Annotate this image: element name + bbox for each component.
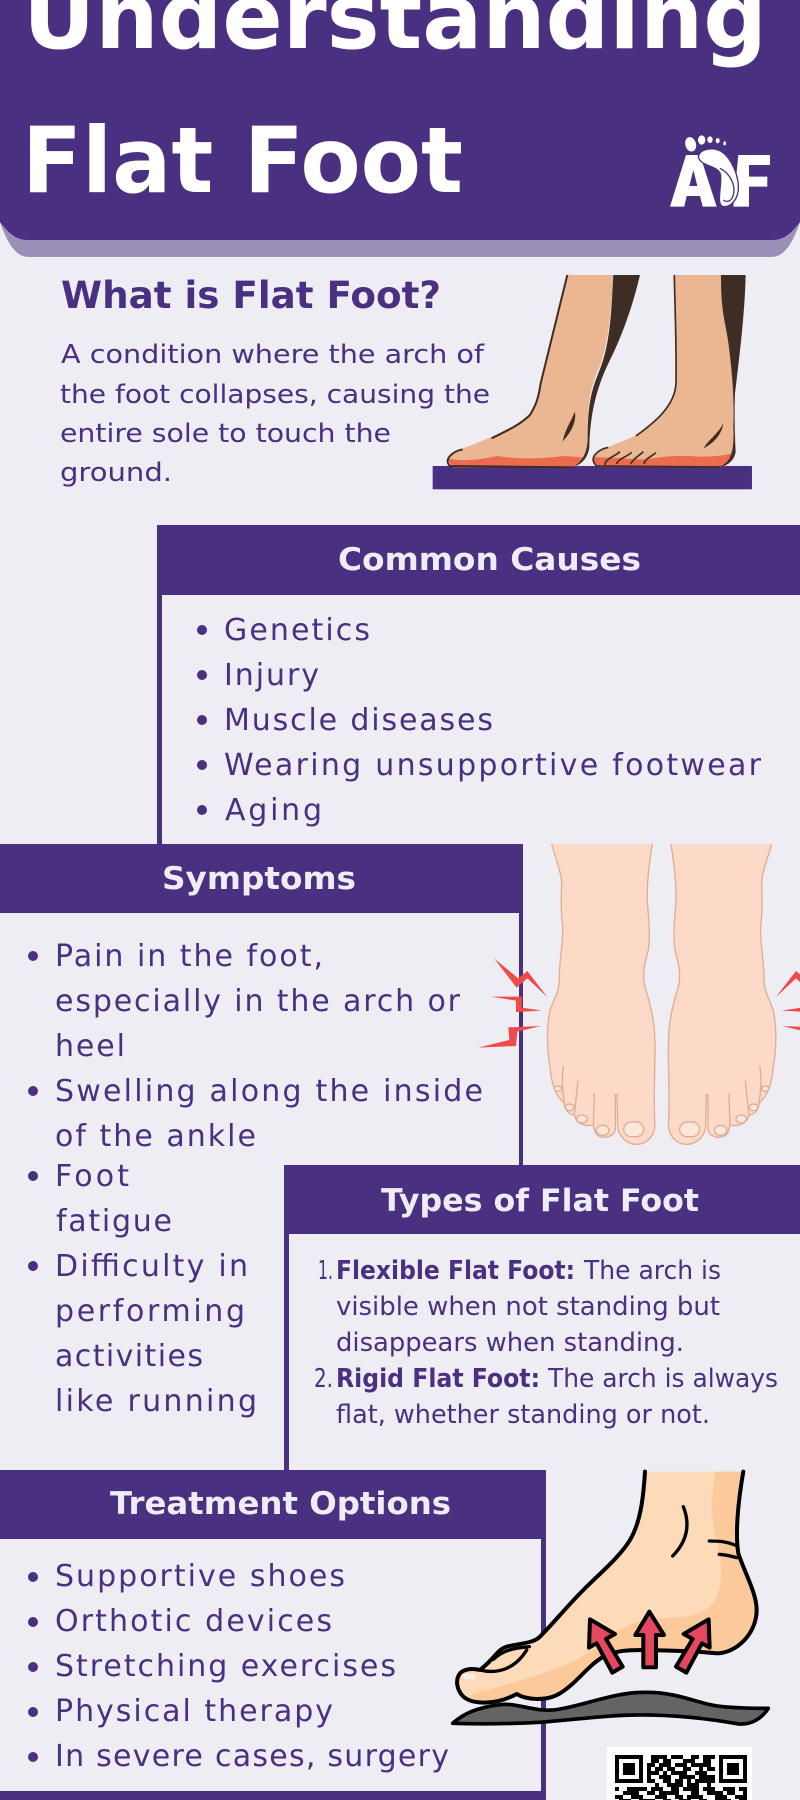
types list: Flexible Flat Foot: — [336, 1256, 575, 1286]
title: second line: Flat Foot — [22, 109, 463, 214]
heading: what is flat foot: What is Flat Foot? — [61, 274, 441, 317]
causes list: Injury — [224, 658, 319, 693]
symptoms list: performing — [55, 1294, 245, 1329]
definition text: the foot collapses, causing the — [60, 380, 490, 410]
heading: symptoms: Symptoms — [162, 861, 356, 897]
symptoms list: like running — [55, 1384, 257, 1419]
definition text — [60, 340, 490, 488]
icon: AF foot logo — [670, 135, 770, 207]
panel: treatment options — [0, 1470, 546, 1800]
causes list: Wearing unsupportive footwear — [224, 748, 762, 783]
qr code — [607, 1747, 752, 1800]
types list: disappears when standing. — [336, 1328, 684, 1358]
types list: visible when not standing but — [336, 1292, 720, 1322]
definition text: ground. — [60, 458, 172, 488]
icon: foot over arch-support insole with up arrows — [453, 1472, 768, 1724]
causes list: Genetics — [224, 613, 370, 648]
symptoms list: of the ankle — [55, 1119, 256, 1154]
causes list: Aging — [225, 793, 322, 828]
types list: 1. — [318, 1256, 333, 1286]
causes list: Muscle diseases — [224, 703, 493, 738]
definition text: A condition where the arch of — [61, 340, 485, 370]
symptoms list — [28, 939, 483, 1419]
types list: Rigid Flat Foot: — [336, 1364, 540, 1394]
symptoms list: Swelling along the inside — [55, 1074, 483, 1109]
symptoms list: especially in the arch or — [55, 984, 461, 1019]
treatment list: In severe cases, surgery — [55, 1739, 449, 1774]
symptoms list: Difficulty in — [55, 1249, 248, 1284]
symptoms list: heel — [55, 1029, 125, 1064]
treatment list: Orthotic devices — [55, 1604, 332, 1639]
icon: flat feet standing on a platform — [433, 275, 752, 489]
types list: 2. — [314, 1364, 333, 1394]
icon: painful feet top view with red pain marks — [478, 844, 800, 1144]
panel: types of flat foot — [284, 1165, 800, 1471]
panel: common causes — [157, 525, 800, 845]
types list: The arch is — [583, 1256, 721, 1286]
definition text: entire sole to touch the — [60, 419, 391, 449]
treatment list: Physical therapy — [55, 1694, 333, 1729]
panel: what is flat foot — [60, 274, 490, 488]
symptoms list: activities — [55, 1339, 203, 1374]
symptoms list: Pain in the foot, — [55, 939, 323, 974]
heading: types of flat foot: Types of Flat Foot — [381, 1183, 699, 1219]
symptoms list: fatigue — [56, 1204, 172, 1239]
types list — [314, 1256, 778, 1430]
treatment list: Stretching exercises — [55, 1649, 396, 1684]
panel: symptoms — [0, 844, 523, 1419]
types list: The arch is always — [547, 1364, 778, 1394]
types list: flat, whether standing or not. — [336, 1400, 710, 1430]
heading: treatment options: Treatment Options — [110, 1486, 451, 1522]
title banner — [0, 0, 800, 257]
treatment list: Supportive shoes — [55, 1559, 345, 1594]
heading: common causes: Common Causes — [338, 542, 641, 578]
symptoms list: Foot — [55, 1159, 129, 1194]
treatment list — [28, 1559, 449, 1774]
causes list — [197, 613, 762, 828]
